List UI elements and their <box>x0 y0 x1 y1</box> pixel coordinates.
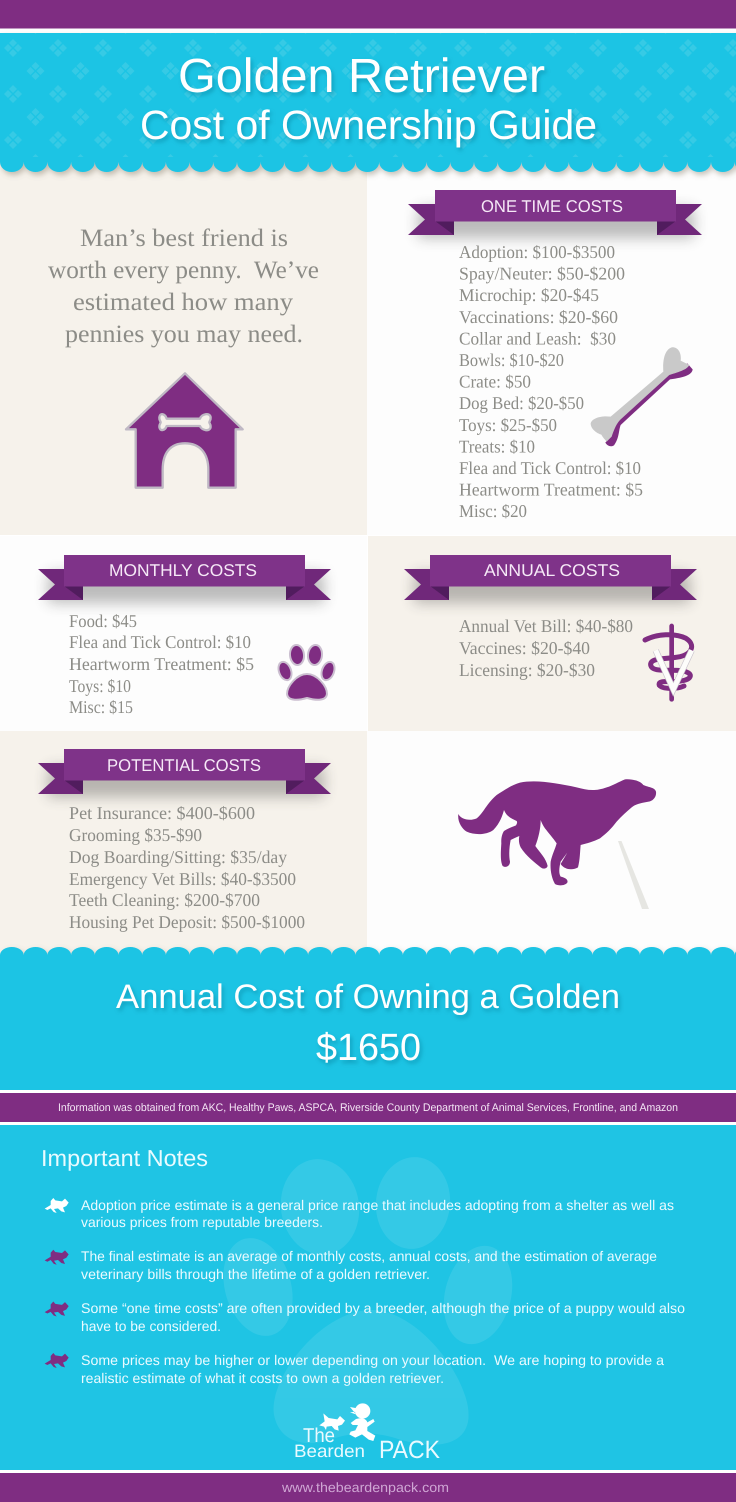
panel: running dog background <box>367 731 736 956</box>
panel: monthly costs background <box>0 536 367 731</box>
header banner <box>0 33 736 172</box>
list: one time costs: Crate: $50 <box>459 372 531 392</box>
annual cost heading and total: Annual Cost of Owning a Golden <box>116 978 620 1016</box>
list: monthly costs: Misc: $15 <box>69 697 133 717</box>
panel: potential costs background <box>0 731 367 956</box>
list: potential costs: Emergency Vet Bills: $40-$3500 <box>69 869 296 889</box>
intro text <box>48 225 319 348</box>
list: potential costs: Grooming $35-$90 <box>69 825 202 845</box>
ribbon: monthly costs: MONTHLY COSTS <box>109 561 257 580</box>
top purple bar <box>0 0 736 28</box>
list: one time costs: Bowls: $10-$20 <box>459 350 564 370</box>
note 2: The final estimate is an average of monthly costs, annual costs, and the estimation of average <box>81 1248 657 1264</box>
list: one time costs: Dog Bed: $20-$50 <box>459 393 584 413</box>
panel: important notes background <box>0 1125 736 1470</box>
ribbon: one time costs <box>408 190 702 238</box>
ribbon: one time costs: ONE TIME COSTS <box>481 197 623 216</box>
note 2: veterinary bills through the lifetime of a golden retriever. <box>81 1266 430 1282</box>
list: potential costs: Dog Boarding/Sitting: $35/day <box>69 847 287 867</box>
note 4 <box>81 1352 664 1386</box>
title <box>140 50 597 148</box>
intro text: pennies you may need. <box>65 321 303 348</box>
list: annual costs: Licensing: $20-$30 <box>459 660 595 680</box>
note 1: Adoption price estimate is a general price range that includes adopting from a shelter as well as <box>81 1197 674 1213</box>
list: one time costs: Misc: $20 <box>459 501 527 521</box>
list: potential costs <box>69 803 305 932</box>
lower white divider <box>0 1470 736 1473</box>
list: one time costs: Microchip: $20-$45 <box>459 285 599 305</box>
icon: bone <box>591 347 693 446</box>
intro text: Man’s best friend is <box>80 225 288 252</box>
ribbon: annual costs: ANNUAL COSTS <box>484 561 620 580</box>
annual cost band <box>0 947 736 1090</box>
logo: The Bearden Pack <box>294 1403 440 1464</box>
sources bar <box>0 1093 736 1122</box>
list: one time costs <box>459 242 643 521</box>
icon: white dog bullet <box>45 1198 69 1213</box>
note 4: realistic estimate of what it costs to own a golden retriever. <box>81 1370 444 1386</box>
title: Golden Retriever <box>178 50 545 103</box>
list: one time costs: Toys: $25-$50 <box>459 415 557 435</box>
panel: one time costs background <box>367 160 736 535</box>
list: annual costs: Annual Vet Bill: $40-$80 <box>459 616 633 636</box>
list: monthly costs: Heartworm Treatment: $5 <box>69 654 254 674</box>
list: potential costs: Pet Insurance: $400-$600 <box>69 803 255 823</box>
note 2 <box>81 1248 657 1282</box>
list: monthly costs: Toys: $10 <box>69 676 131 696</box>
icon: paw print <box>276 644 337 700</box>
list: one time costs: Heartworm Treatment: $5 <box>459 480 643 500</box>
ribbon: annual costs <box>404 555 697 603</box>
note 3: have to be considered. <box>81 1318 221 1334</box>
sources bar: Information was obtained from AKC, Healthy Paws, ASPCA, Riverside County Department of Animal Services, Frontline, and Amazon <box>58 1102 678 1114</box>
footer bar <box>0 1473 736 1502</box>
ribbon: potential costs: POTENTIAL COSTS <box>107 756 261 775</box>
panel: intro background <box>0 160 367 535</box>
ribbon: potential costs <box>38 749 331 797</box>
intro text: estimated how many <box>73 289 294 316</box>
heading: important notes: Important Notes <box>41 1145 208 1171</box>
icon: purple dog bullet <box>45 1250 69 1265</box>
list: monthly costs <box>69 611 254 717</box>
list: potential costs: Housing Pet Deposit: $500-$1000 <box>69 912 305 932</box>
list: monthly costs: Flea and Tick Control: $10 <box>69 632 251 652</box>
note 1 <box>81 1197 674 1230</box>
note 3 <box>81 1300 685 1334</box>
logo: The Bearden Pack: PACK <box>379 1436 440 1464</box>
icon: purple dog bullet <box>45 1301 69 1316</box>
logo: The Bearden Pack: The <box>303 1425 335 1447</box>
list: one time costs: Vaccinations: $20-$60 <box>459 307 618 327</box>
list: one time costs: Spay/Neuter: $50-$200 <box>459 264 625 284</box>
list: one time costs: Treats: $10 <box>459 436 535 456</box>
ribbon: monthly costs <box>38 555 331 603</box>
illustration: running dog silhouette <box>458 779 656 885</box>
annual cost heading and total: $1650 <box>316 1027 421 1069</box>
note 3: Some “one time costs” are often provided by a breeder, although the price of a puppy would also <box>81 1300 685 1316</box>
note 4: Some prices may be higher or lower depending on your location. We are hoping to provide a <box>81 1352 664 1368</box>
list: one time costs: Flea and Tick Control: $10 <box>459 458 641 478</box>
white divider strip <box>0 1090 736 1125</box>
logo: The Bearden Pack: Bearden <box>294 1441 365 1461</box>
intro text: worth every penny. We’ve <box>48 257 319 284</box>
list: one time costs: Collar and Leash: $30 <box>459 328 616 348</box>
illustration: dog motion streak <box>618 841 649 909</box>
title: Cost of Ownership Guide <box>140 102 597 148</box>
icon: veterinary caduceus <box>645 626 692 699</box>
panel: annual costs background <box>368 536 736 731</box>
footer bar: www.thebeardenpack.com <box>281 1480 449 1495</box>
icon: dog house <box>126 373 243 488</box>
annual cost heading and total <box>116 978 620 1069</box>
list: potential costs: Teeth Cleaning: $200-$700 <box>69 890 260 910</box>
icon: purple dog bullet <box>45 1353 69 1368</box>
list: monthly costs: Food: $45 <box>69 611 137 631</box>
watermark: large paw print <box>212 1153 522 1445</box>
list: annual costs <box>459 616 633 680</box>
list: one time costs: Adoption: $100-$3500 <box>459 242 615 262</box>
note 1: various prices from reputable breeders. <box>81 1214 323 1230</box>
list: annual costs: Vaccines: $20-$40 <box>459 638 590 658</box>
